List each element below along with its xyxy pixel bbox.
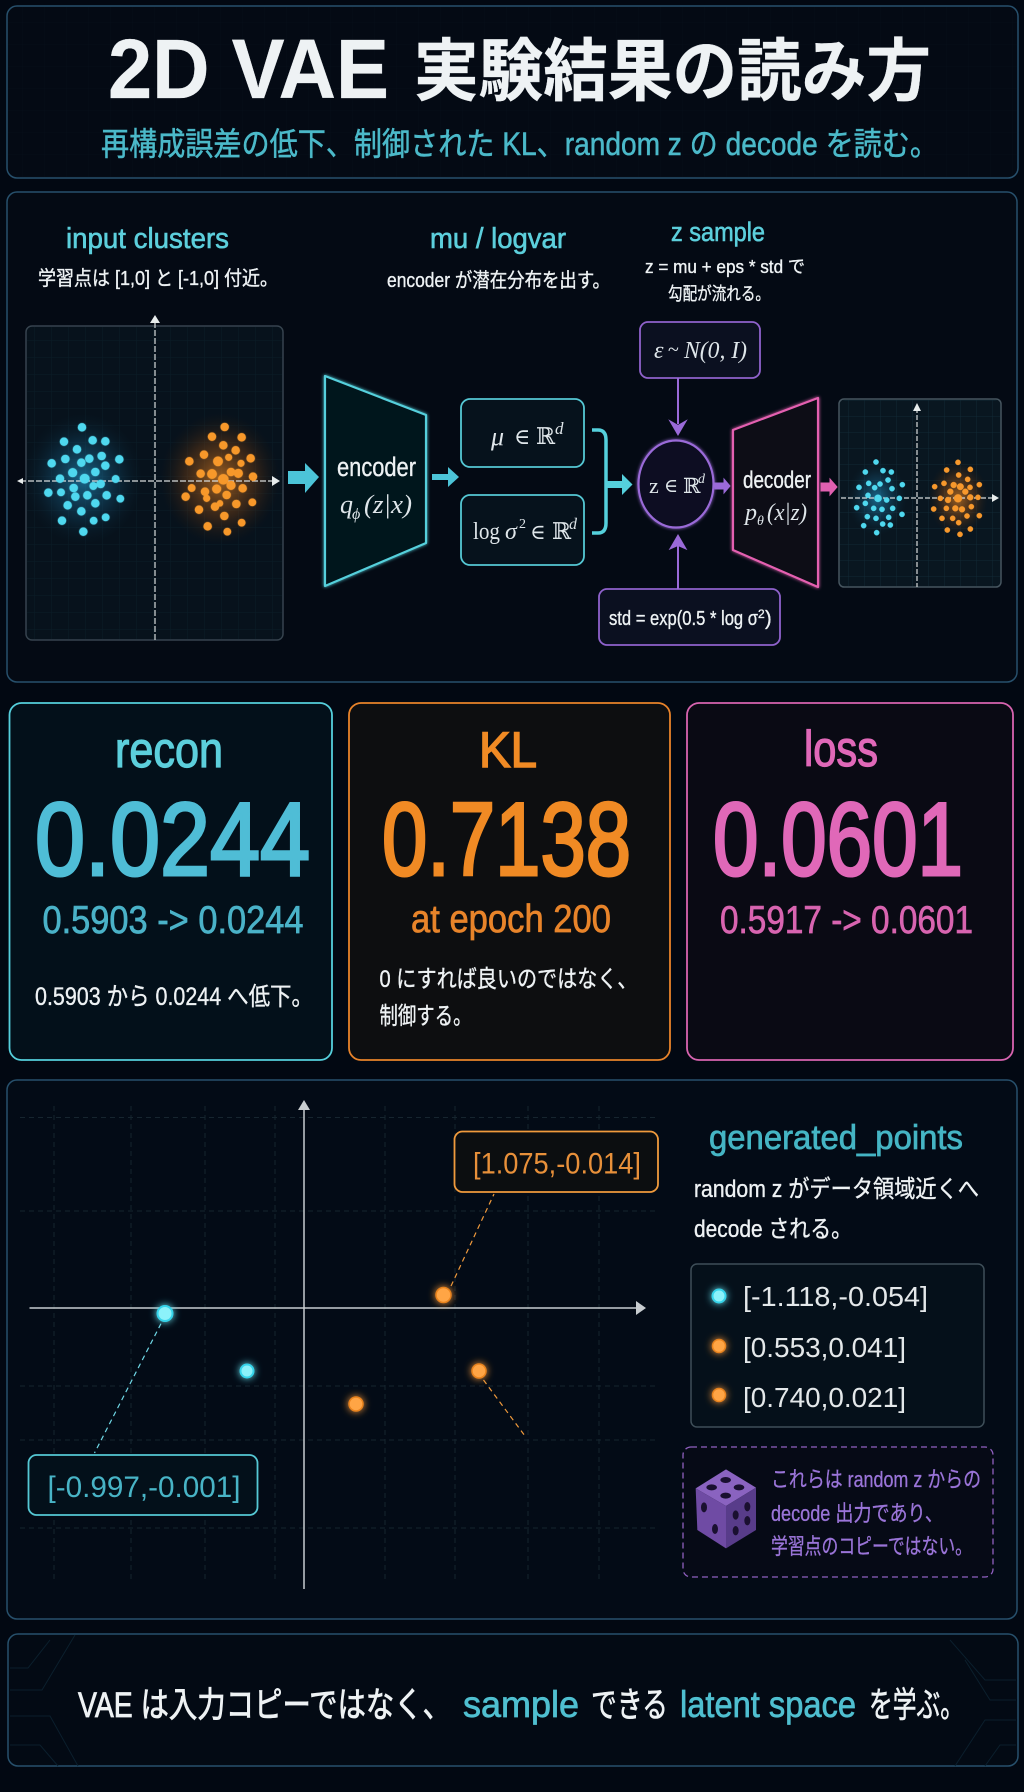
decoder block: (x|z) xyxy=(767,500,807,526)
box: epsilon: ~ xyxy=(668,339,679,361)
note: recon: 0.5903 から 0.0244 へ低下。 xyxy=(35,983,313,1011)
box: std xyxy=(599,589,780,645)
arrow: encoder to mu logvar xyxy=(432,467,459,487)
box: log variance: log xyxy=(473,519,500,545)
encoder block: ϕ xyxy=(352,506,360,523)
card: KL: KL xyxy=(479,722,537,778)
node: z latent: z xyxy=(649,473,659,498)
note: KL: 制御する。 xyxy=(380,1003,472,1030)
box: log variance: ℝ xyxy=(552,519,572,544)
panel: footer xyxy=(8,1634,1018,1766)
chart: input clusters scatter xyxy=(17,315,283,640)
takeaway text: VAE は入力コピーではなく、 xyxy=(78,1686,451,1725)
text: generated note xyxy=(694,1176,979,1243)
legend: point values xyxy=(691,1264,984,1427)
legend: point values: [0.740,0.021] xyxy=(743,1382,906,1413)
card: loss: loss xyxy=(804,721,878,777)
takeaway text: latent space xyxy=(680,1684,856,1725)
text: dice note: これらは random z からの xyxy=(771,1467,981,1492)
callout: cyan point: [-0.997,-0.001] xyxy=(48,1471,240,1504)
heading: generated_points: generated_points xyxy=(709,1119,963,1157)
box: log variance: 2 xyxy=(519,517,526,532)
arrow: decoder to output plot xyxy=(821,479,837,495)
encoder block: encoder xyxy=(337,452,416,482)
box: std: 2 xyxy=(758,607,765,621)
icon: dice xyxy=(696,1469,756,1548)
value: loss: 0.0601 xyxy=(713,782,963,898)
box: std: std = exp(0.5 * log σ xyxy=(609,608,759,630)
box: mu: d xyxy=(555,419,564,438)
arrow: std to z xyxy=(671,536,685,589)
card: loss xyxy=(687,703,1013,1060)
node: z latent: ℝ xyxy=(683,474,701,498)
encoder block: (z|x) xyxy=(364,490,412,519)
decoder block: θ xyxy=(757,514,764,529)
text: dice note: decode 出力であり、 xyxy=(771,1501,943,1526)
chart: generated scatter xyxy=(20,1100,658,1589)
card: KL xyxy=(349,703,670,1060)
title: 2D VAE xyxy=(108,22,389,116)
title xyxy=(108,22,931,116)
takeaway text: できる xyxy=(591,1686,668,1725)
callout: dice note xyxy=(683,1447,993,1577)
box: epsilon: N(0, I) xyxy=(683,338,747,364)
text: z sample note: 勾配が流れる。 xyxy=(668,284,770,304)
arrow: epsilon to z xyxy=(671,378,685,434)
box: mu: ℝ xyxy=(536,424,556,449)
takeaway text: を学ぶ。 xyxy=(869,1686,964,1725)
heading: z sample: z sample xyxy=(671,217,765,247)
text: mu logvar note: encoder が潜在分布を出す。 xyxy=(387,269,610,292)
trend: KL: at epoch 200 xyxy=(411,898,611,941)
panel: generated points xyxy=(7,1080,1017,1619)
box: log variance: d xyxy=(569,516,578,533)
title: 実験結果の読み方 xyxy=(414,34,931,110)
value: KL: 0.7138 xyxy=(382,782,631,898)
decoder block: p xyxy=(743,500,757,526)
card: recon xyxy=(10,703,332,1060)
text: z sample note: z = mu + eps * std で xyxy=(645,257,805,277)
callout: cyan point xyxy=(28,1455,258,1515)
text: generated note: decode される。 xyxy=(694,1216,852,1243)
arrow: plot to encoder xyxy=(288,463,319,493)
box: mu xyxy=(461,399,584,467)
node: z latent: ∈ xyxy=(664,476,678,497)
panel: header xyxy=(7,6,1018,178)
box: epsilon xyxy=(640,322,760,378)
encoder block: q xyxy=(340,490,353,519)
box: mu: μ xyxy=(490,422,504,451)
box: std: ) xyxy=(765,608,772,630)
box: log variance: ∈ xyxy=(530,520,546,544)
callout: orange point: [1.075,-0.014] xyxy=(473,1148,641,1180)
text: generated note: random z がデータ領域近くへ xyxy=(694,1176,979,1203)
box: log variance xyxy=(461,495,584,565)
decoder block xyxy=(733,398,818,587)
takeaway text: sample xyxy=(463,1684,579,1725)
text: dice note xyxy=(771,1467,981,1559)
box: log variance: σ xyxy=(505,519,518,545)
text: input clusters note: 学習点は [1,0] と [-1,0] 付近。 xyxy=(38,267,278,290)
heading: input clusters: input clusters xyxy=(66,223,229,255)
callout: orange point xyxy=(454,1132,658,1192)
arrow: z to decoder xyxy=(715,479,730,493)
text: z sample note xyxy=(645,257,805,304)
legend: point values: [0.553,0.041] xyxy=(743,1332,906,1363)
legend: point values: [-1.118,-0.054] xyxy=(743,1281,928,1312)
card: recon: recon xyxy=(115,722,223,778)
chart: decoded output scatter xyxy=(839,399,1001,587)
encoder block xyxy=(325,376,426,586)
note: KL xyxy=(380,966,638,1030)
trend: recon: 0.5903 -> 0.0244 xyxy=(42,899,304,942)
panel: pipeline xyxy=(7,192,1017,682)
box: mu: ∈ xyxy=(514,424,530,449)
value: recon: 0.0244 xyxy=(35,782,310,898)
node: z latent xyxy=(638,440,714,528)
node: z latent: d xyxy=(698,472,706,487)
note: KL: 0 にすれば良いのではなく、 xyxy=(380,966,638,993)
box: epsilon: ε xyxy=(654,338,664,364)
arrow: bracket into z xyxy=(592,430,632,533)
heading: mu logvar: mu / logvar xyxy=(430,223,566,255)
decoder block: decoder xyxy=(743,467,811,494)
trend: loss: 0.5917 -> 0.0601 xyxy=(720,899,973,942)
takeaway text xyxy=(78,1684,964,1725)
